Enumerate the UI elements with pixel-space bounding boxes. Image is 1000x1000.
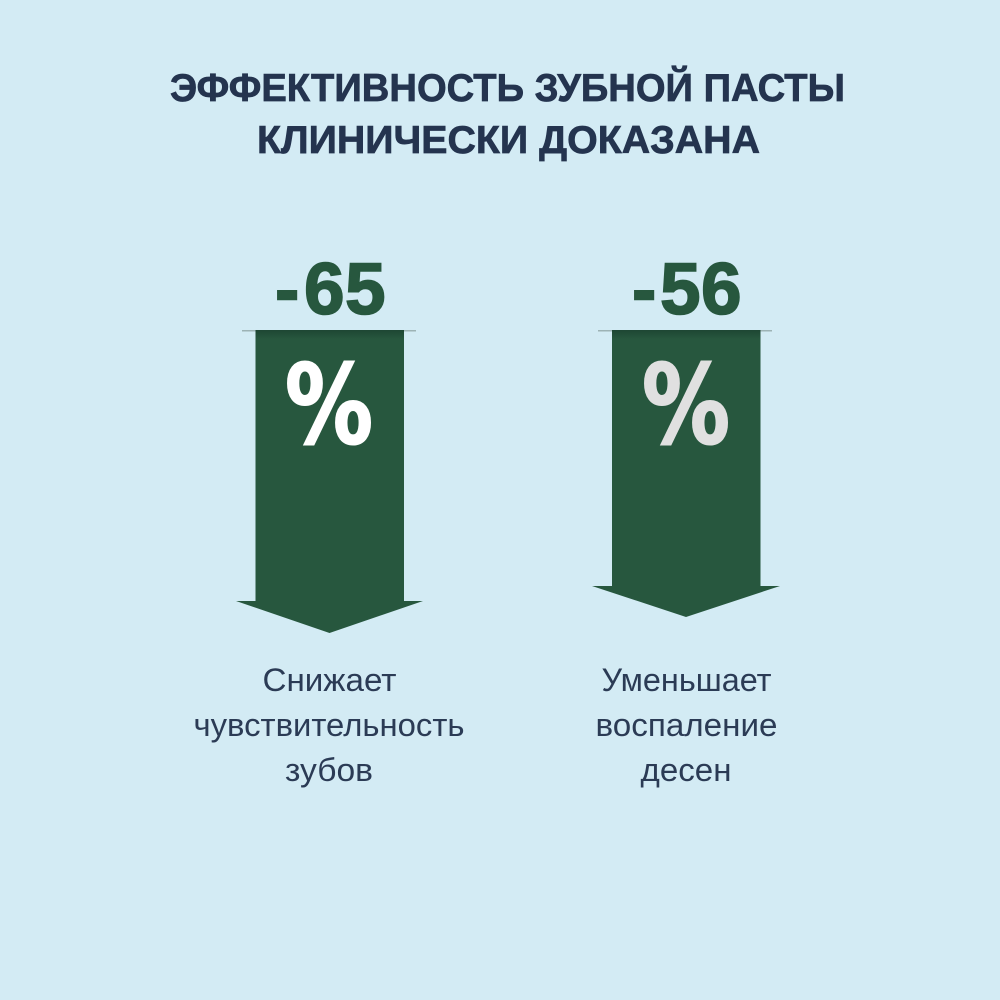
label: reduced inflammation (596, 662, 778, 788)
label: reduced sensitivity: Снижает (262, 662, 397, 698)
title: КЛИНИЧЕСКИ ДОКАЗАНА (257, 119, 760, 162)
value: minus 56: -56 (632, 249, 742, 330)
label: reduced inflammation: Уменьшает (602, 662, 772, 698)
arrow: down 56 (592, 330, 780, 617)
panel: reduced inflammation (592, 249, 780, 788)
label: reduced inflammation: воспаление (596, 707, 778, 743)
label: reduced sensitivity: зубов (285, 752, 373, 788)
label: reduced inflammation: десен (640, 752, 732, 788)
value: minus 65: -65 (275, 249, 386, 330)
title (170, 65, 845, 162)
arrow: down 65 (236, 330, 423, 633)
panel: reduced sensitivity (194, 249, 464, 788)
percent sign 65: % (285, 341, 373, 469)
percent sign 56: % (642, 341, 730, 469)
label: reduced sensitivity (194, 662, 464, 788)
label: reduced sensitivity: чувствительность (194, 707, 464, 743)
title: ЭФФЕКТИВНОСТЬ ЗУБНОЙ ПАСТЫ (170, 65, 845, 110)
